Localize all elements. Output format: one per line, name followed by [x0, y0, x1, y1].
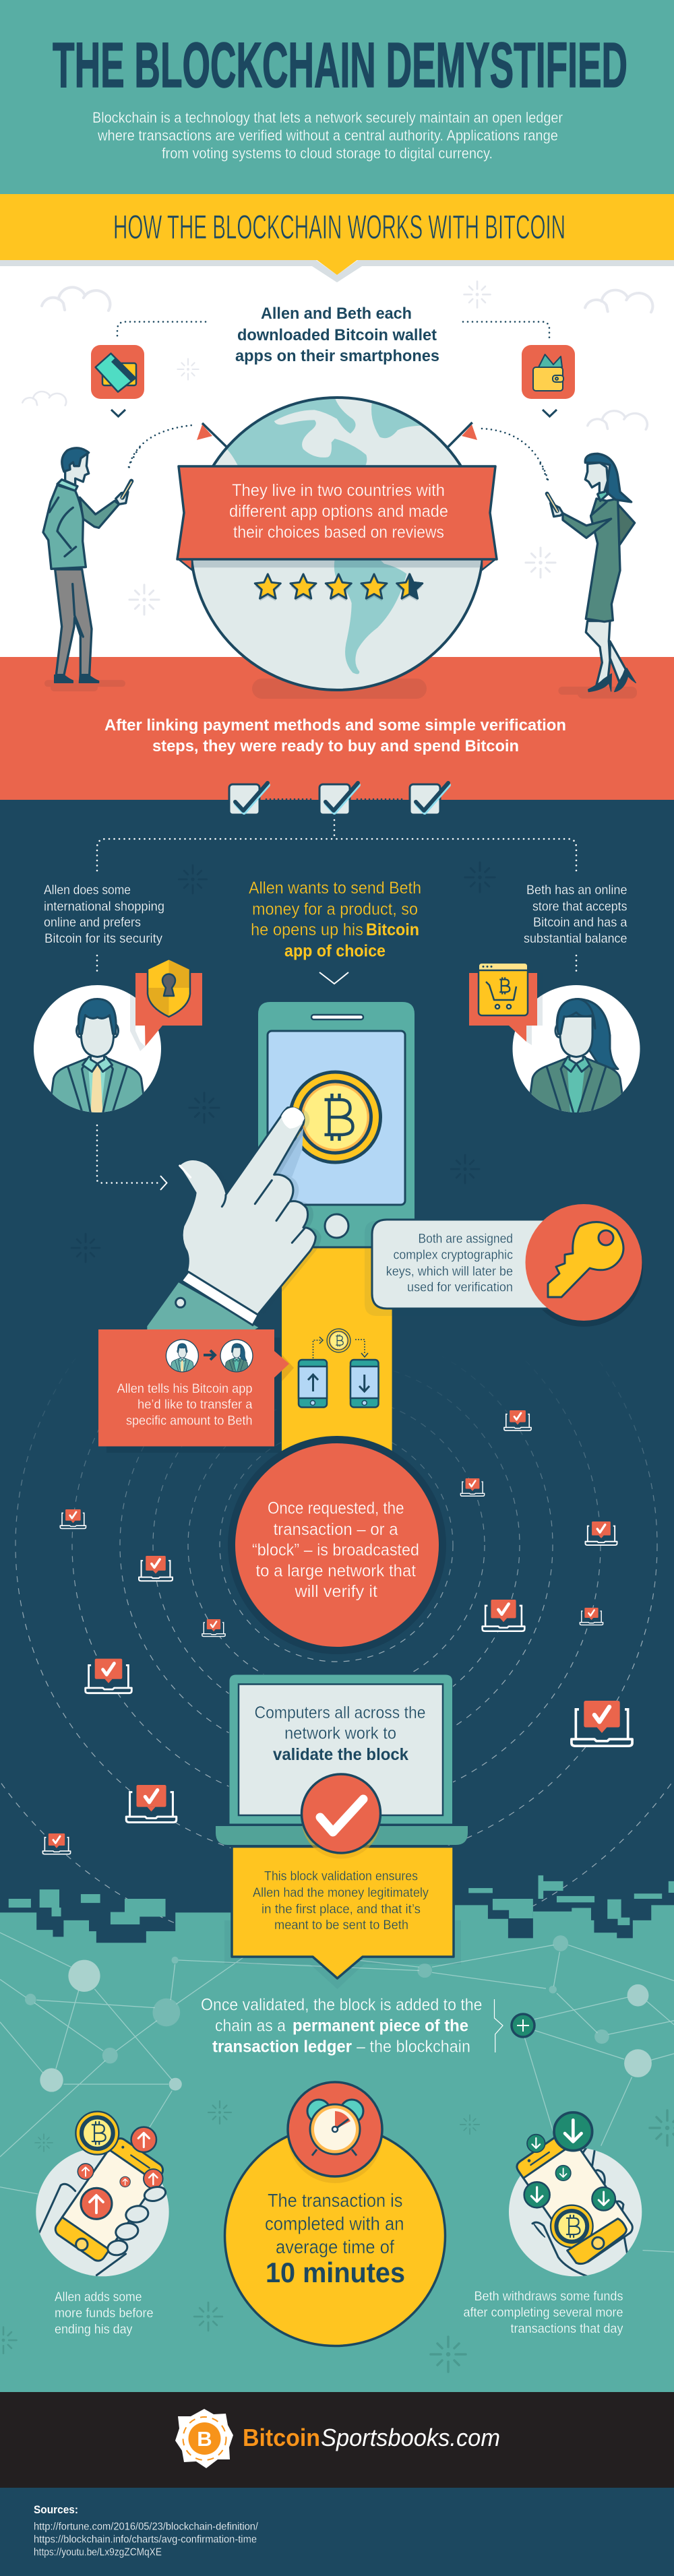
intro paragraph: [92, 109, 563, 162]
avatar: Beth: [512, 985, 640, 1113]
circle text: 10 minutes: [266, 2257, 405, 2288]
text: Beth withdraws funds: Beth withdraws some funds: [474, 2290, 623, 2304]
callout text: Allen tells his Bitcoin app: [117, 1382, 252, 1396]
bracket to plus node: [495, 1999, 503, 2052]
circle text: [265, 2190, 405, 2288]
illustration: Beth's phone: [509, 2112, 642, 2276]
panel: red band: [0, 657, 674, 800]
intro paragraph: from voting systems to cloud storage to digital currency.: [162, 145, 493, 162]
logo wordmark: Bitcoin: [243, 2424, 320, 2451]
text: once validated: chain as a: [215, 2016, 286, 2035]
text: Beth withdraws funds: [464, 2290, 623, 2336]
panel: header: [0, 0, 674, 194]
banner: [177, 466, 497, 559]
blockchain network nodes: [0, 1933, 674, 2252]
panel: navy section: [0, 800, 674, 1811]
cuff: [181, 1271, 258, 1325]
icon: wallet: [522, 345, 575, 399]
text: Allen adds funds: more funds before: [55, 2306, 154, 2321]
text: Beth withdraws funds: after completing several more: [464, 2306, 623, 2320]
callout text: specific amount to Beth: [126, 1414, 252, 1428]
network laptops: [42, 1410, 632, 1854]
banner text: different app options and made: [229, 502, 448, 521]
key text: [386, 1232, 513, 1295]
chevrons under icons: [111, 410, 557, 416]
icon: shield: [148, 959, 190, 1017]
text: Beth's note: Beth has an online: [526, 883, 627, 898]
text: once validated: permanent piece of the: [293, 2016, 468, 2035]
circle text: completed with an: [265, 2213, 404, 2234]
text: Allen adds funds: ending his day: [55, 2323, 133, 2337]
text: Allen wants to send: Allen wants to send Beth: [249, 879, 421, 898]
text: Allen's note: online and prefers: [44, 916, 141, 930]
text: Allen wants to send: app of choice: [284, 942, 386, 961]
text: Allen's note: [44, 883, 164, 946]
intro paragraph: where transactions are verified without a central authority. Applications range: [97, 127, 558, 144]
panel: sources: https://blockchain.info/charts/avg-confirmation-time: [34, 2534, 257, 2546]
text: Allen adds funds: [55, 2290, 154, 2337]
figure: Allen standing: [43, 447, 141, 691]
circle: transaction broadcast: to a large network that: [256, 1562, 416, 1581]
callout: block validation: [224, 1846, 461, 1989]
arrow to hand: [160, 1176, 167, 1190]
text: once validated: Once validated, the block is added to the: [201, 1996, 483, 2015]
text: Allen and Beth downloaded: [235, 305, 439, 365]
big phone: [258, 1002, 415, 1247]
callout: block validation: in the first place, and that it’s: [262, 1903, 421, 1916]
panel: sources: https://youtu.be/Lx9zgZCMqXE: [34, 2547, 162, 2558]
dotted bracket to Allen and Beth: [97, 820, 576, 1183]
callout: cryptographic keys: [365, 1204, 643, 1327]
banner text: [229, 481, 448, 542]
avatar: Allen: [34, 985, 161, 1113]
circle: transaction broadcast: transaction – or a: [274, 1520, 398, 1539]
text: Allen and Beth downloaded: Allen and Beth each: [261, 305, 412, 323]
circle: transaction broadcast: [228, 1436, 446, 1654]
text: Allen wants to send: [249, 879, 421, 961]
yellow transfer column: [282, 1247, 392, 1470]
callout: block validation: meant to be sent to Beth: [274, 1918, 408, 1933]
icon: store: [479, 963, 528, 1015]
bitcoin coin: [290, 1072, 380, 1162]
text: Allen's note: Bitcoin for its security: [44, 932, 162, 946]
globe: [191, 398, 483, 690]
banner text: their choices based on reviews: [233, 523, 444, 542]
callout: block validation: Allen had the money legitimately: [253, 1886, 429, 1900]
key text: complex cryptographic: [394, 1248, 513, 1263]
icon: credit cards: [91, 345, 144, 399]
logo wordmark: Sportsbooks.com: [321, 2424, 500, 2451]
hand pressing coin: [147, 1107, 321, 1331]
text: Allen's note: Allen does some: [44, 883, 131, 898]
transfer diagram: phones and coin: [299, 1329, 379, 1407]
logo badge: [175, 2409, 233, 2468]
text: after linking payment methods: steps, they were ready to buy and spend Bitcoin: [152, 737, 519, 755]
logo wordmark: [243, 2424, 500, 2451]
text: Allen wants to send: Bitcoin: [366, 920, 419, 939]
circle text: The transaction is: [268, 2190, 403, 2211]
text: Beth's note: [524, 883, 627, 946]
illustration: Allen's phone: [36, 2112, 169, 2276]
chevron above phone: [319, 972, 348, 984]
banner text: They live in two countries with: [232, 481, 445, 500]
clouds and sparkles: [22, 282, 652, 615]
icon: plus node: [512, 2014, 534, 2037]
callout: block validation: This block validation ensures: [264, 1869, 418, 1884]
banner fold: [179, 559, 495, 570]
circle text: average time of: [276, 2236, 394, 2257]
panel: sources: http://fortune.com/2016/05/23/blockchain-definition/: [34, 2521, 259, 2532]
laptop text: [255, 1703, 426, 1764]
text: once validated: – the blockchain: [357, 2038, 470, 2056]
sleeve: [147, 1282, 258, 1331]
text: Allen wants to send: money for a product, so: [252, 900, 418, 919]
laptop text: validate the block: [273, 1745, 408, 1764]
speech bubble: security shield: [130, 959, 202, 1051]
icon: key: [548, 1222, 623, 1297]
text: Beth's note: Bitcoin and has a: [533, 916, 627, 930]
text: Allen adds funds: Allen adds some: [55, 2290, 142, 2304]
text: Allen and Beth downloaded: apps on their smartphones: [235, 347, 439, 365]
circle: transaction completed: [225, 2089, 445, 2346]
panel: sources: Sources:: [34, 2503, 78, 2516]
check badge: [302, 1774, 380, 1858]
panel: section heading band: [0, 194, 674, 282]
mini avatars: [166, 1339, 253, 1373]
big laptop: validate the block: [216, 1674, 468, 1845]
circle: transaction broadcast: Once requested, the: [268, 1499, 404, 1517]
globe shadow: [252, 679, 427, 699]
logo badge: B: [197, 2427, 212, 2451]
panel: scene background white: [0, 260, 674, 658]
star rating: [255, 574, 423, 601]
callout text: [117, 1382, 253, 1428]
text: Allen's note: international shopping: [44, 900, 164, 914]
text: after linking payment methods: [104, 716, 566, 755]
laptop text: Computers all across the: [255, 1703, 426, 1722]
checkboxes: [229, 783, 449, 815]
speech bubble: bitcoin store: [469, 963, 543, 1045]
circle: transaction broadcast: will verify it: [294, 1582, 377, 1601]
panel: footer logo band: [0, 2392, 674, 2488]
key text: used for verification: [407, 1281, 513, 1295]
panel: sources: [0, 2488, 674, 2576]
intro paragraph: Blockchain is a technology that lets a network securely maintain an open ledger: [92, 109, 563, 126]
text: Allen wants to send: he opens up his: [251, 920, 363, 939]
text: Allen and Beth downloaded: downloaded Bitcoin wallet: [237, 326, 437, 344]
text: Beth's note: store that accepts: [532, 900, 627, 914]
figure: Beth standing: [539, 453, 637, 699]
text: Beth's note: substantial balance: [524, 932, 627, 946]
text: after linking payment methods: After linking payment methods and some simple verification: [104, 716, 566, 734]
panel: lower teal section: [0, 1875, 674, 2392]
network rings: [0, 1134, 674, 1956]
flags: [197, 422, 477, 448]
navy sparkles: [71, 862, 495, 1262]
dotted connectors to app icons: [117, 322, 549, 480]
text: once validated: [201, 1996, 483, 2056]
key text: keys, which will later be: [386, 1265, 513, 1279]
circle: transaction broadcast: “block” – is broadcasted: [252, 1540, 419, 1559]
teal sparkles: [0, 2101, 674, 2372]
icon: alarm clock: [288, 2082, 382, 2176]
key text: Both are assigned: [418, 1232, 513, 1247]
text: Beth withdraws funds: transactions that day: [511, 2322, 623, 2336]
globe with banner: [177, 398, 497, 699]
callout text: he’d like to transfer a: [137, 1397, 253, 1412]
callout: Allen tells his app: [98, 1329, 294, 1453]
laptop text: network work to: [284, 1724, 396, 1742]
text: once validated: transaction ledger: [212, 2038, 352, 2056]
